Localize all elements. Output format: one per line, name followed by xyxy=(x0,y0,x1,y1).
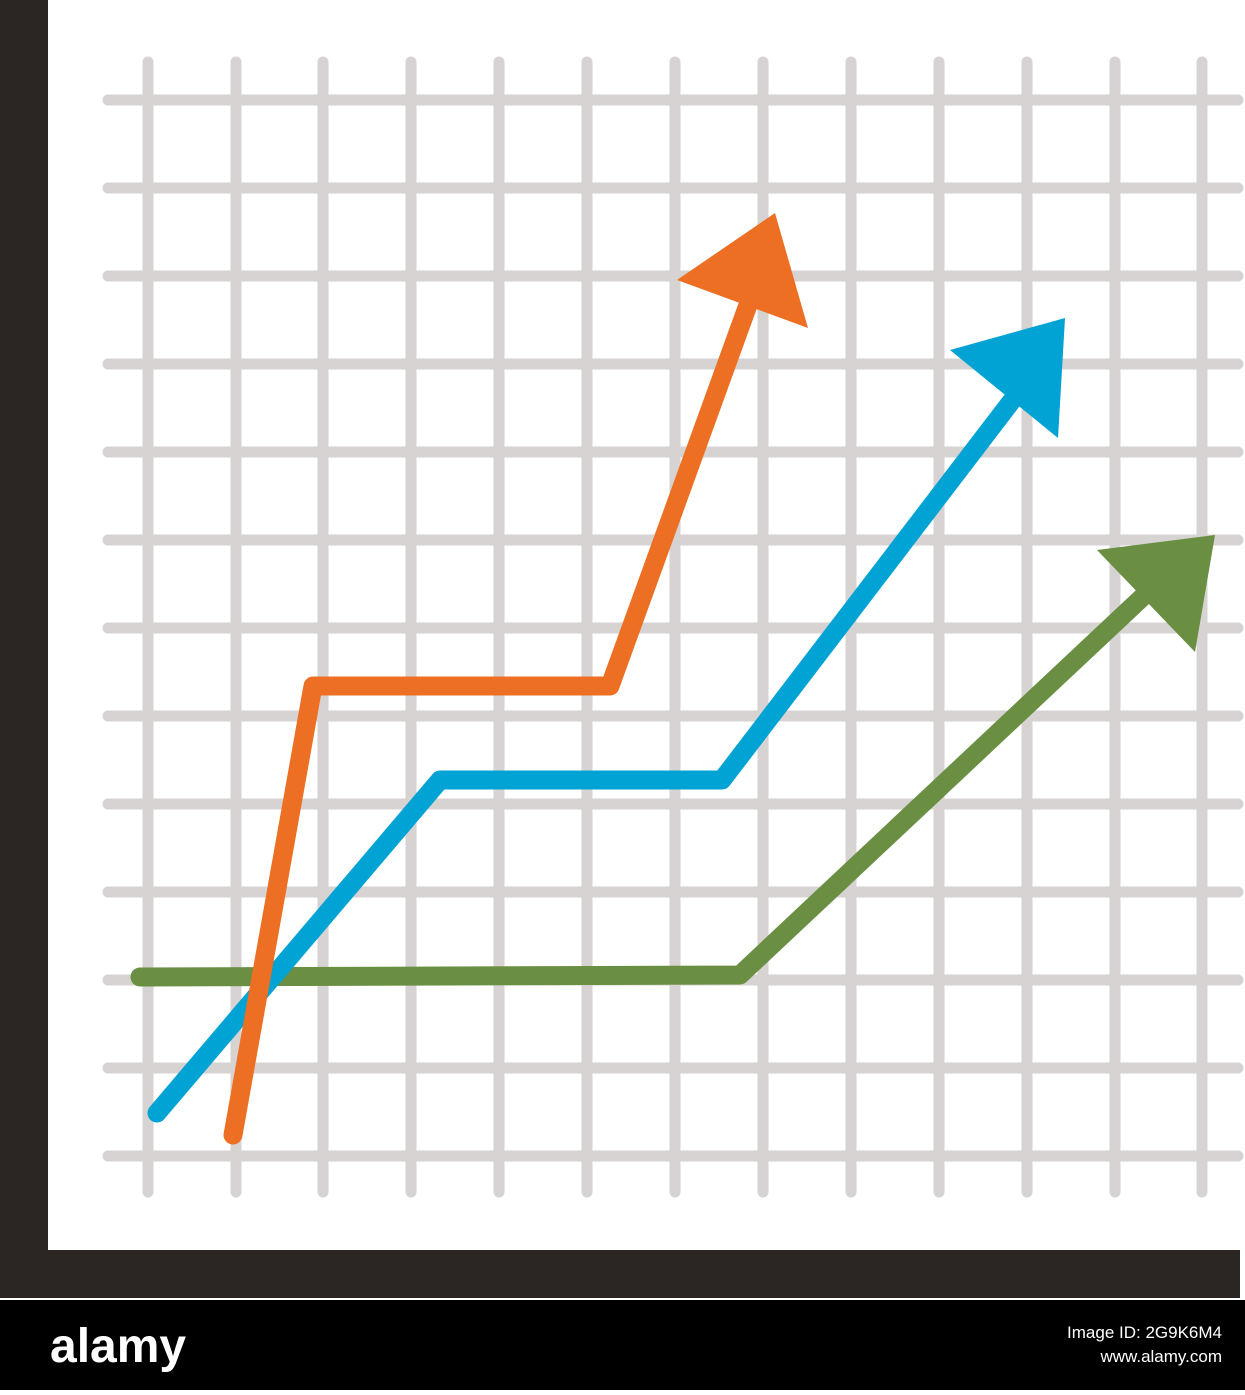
footer bar: www.alamy.com xyxy=(1099,1347,1222,1366)
blue trend arrow xyxy=(157,318,1065,1113)
green trend arrow xyxy=(140,535,1215,977)
axis: horizontal xyxy=(0,1250,1240,1298)
footer bar xyxy=(0,1300,1245,1390)
axis: vertical xyxy=(0,0,48,1298)
orange trend arrow xyxy=(233,213,808,1135)
footer bar: Image ID: 2G9K6M4 xyxy=(1067,1323,1222,1342)
footer bar: alamy xyxy=(50,1320,186,1373)
